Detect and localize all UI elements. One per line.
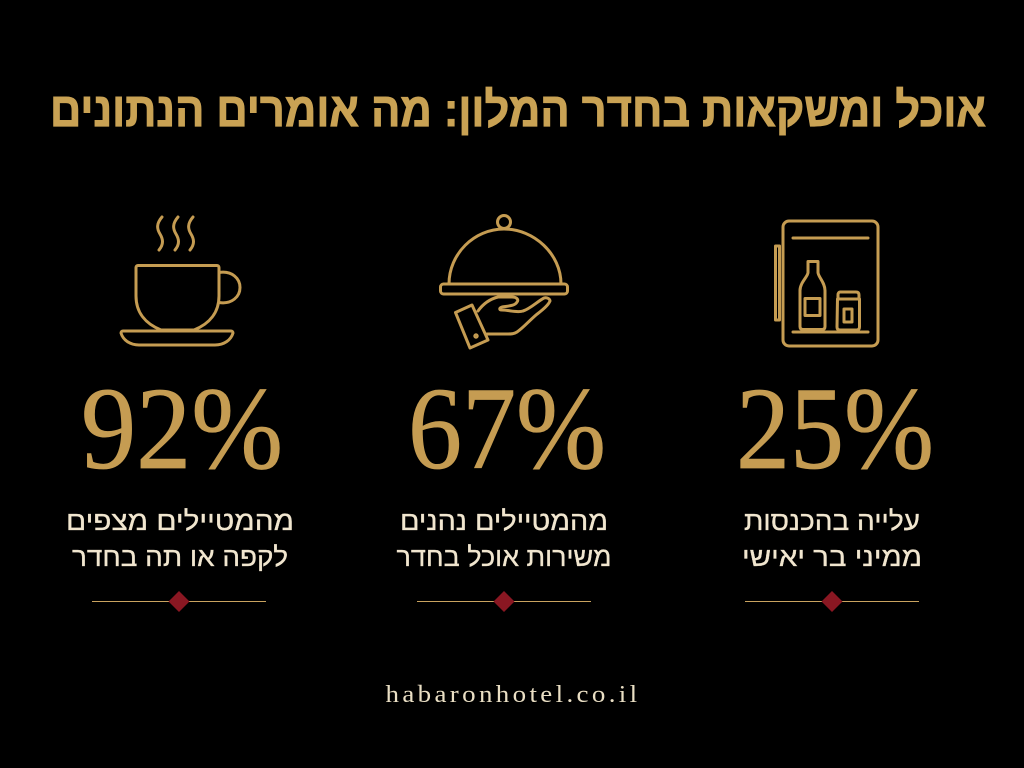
caption: minibar	[742, 506, 922, 572]
stat: 92%: 92%	[81, 363, 283, 494]
caption: coffee or tea: לקפה או תה בחדר	[72, 542, 288, 572]
panel: minibar	[736, 221, 934, 612]
icon: coffee cup	[121, 217, 240, 345]
divider with diamond	[745, 591, 919, 612]
caption: in-room dining: מהמטיילים נהנים	[400, 506, 608, 536]
panel: in-room dining	[396, 216, 612, 612]
website footer: habaronhotel.co.il	[386, 682, 640, 708]
caption: minibar: עלייה בהכנסות	[744, 506, 920, 536]
divider with diamond	[92, 591, 266, 612]
caption: in-room dining: משירות אוכל בחדר	[396, 542, 612, 572]
icon: cloche and hand	[440, 216, 568, 348]
divider with diamond	[417, 591, 591, 612]
stat: 67%: 67%	[408, 363, 606, 494]
caption: minibar: ממיני בר יאישי	[742, 542, 922, 572]
stat: 25%: 25%	[736, 363, 934, 494]
icon: minibar fridge	[776, 221, 878, 346]
caption: in-room dining	[396, 506, 612, 572]
caption: coffee or tea	[66, 506, 294, 572]
caption: coffee or tea: מהמטיילים מצפים	[66, 506, 294, 536]
panel: coffee or tea	[66, 217, 294, 612]
